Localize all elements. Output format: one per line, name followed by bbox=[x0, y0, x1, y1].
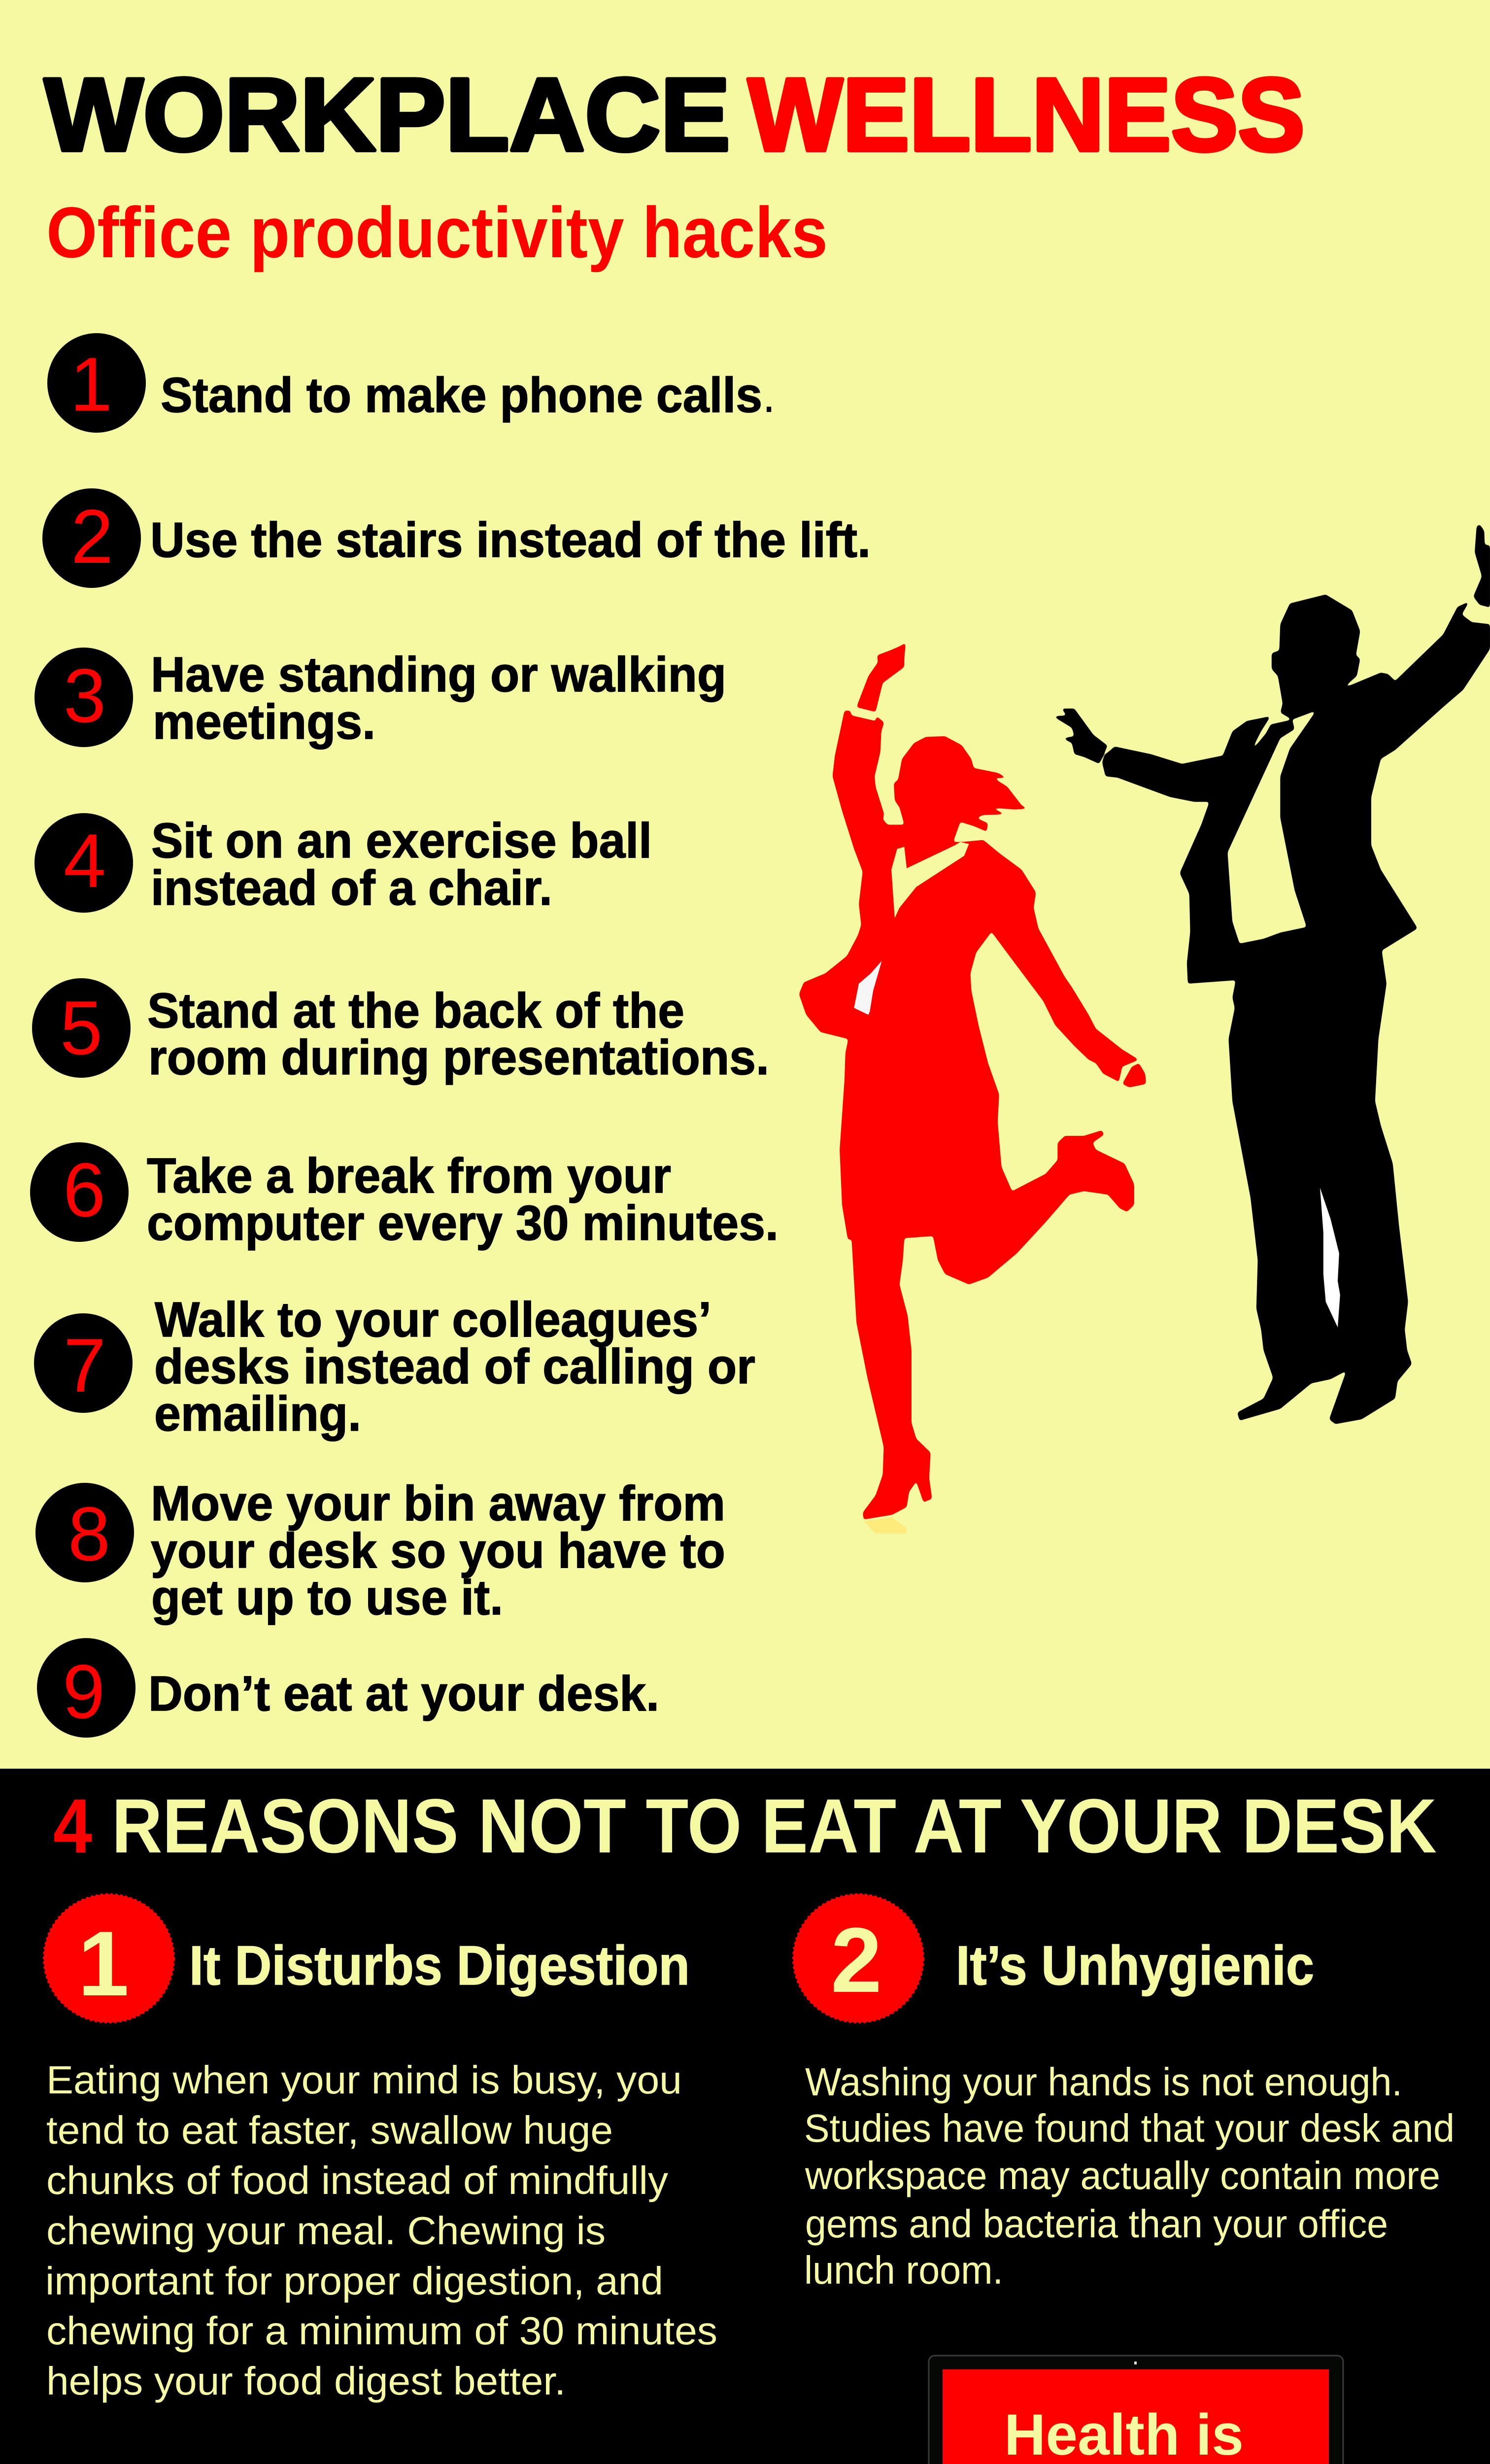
hack 4: instead of a chair. bbox=[151, 860, 552, 916]
reason 2: It’s Unhygienic bbox=[956, 1935, 1314, 1996]
hack 9: Don’t eat at your desk. bbox=[148, 1666, 659, 1721]
illustration: computer monitor bbox=[929, 2356, 1343, 2464]
reason 2 body bbox=[804, 2060, 1455, 2292]
hack 8: get up to use it. bbox=[151, 1570, 503, 1625]
hack 6: Take a break from your bbox=[147, 1148, 671, 1203]
hack 2 bbox=[42, 488, 871, 588]
hack 4 bbox=[34, 813, 652, 916]
hack 6: computer every 30 minutes. bbox=[147, 1196, 779, 1251]
reason 1: 1 bbox=[78, 1912, 129, 2015]
reason 1 body: chewing for a minimum of 30 minutes bbox=[46, 2309, 717, 2353]
hack 3: 3 bbox=[64, 653, 106, 738]
hack 1 bbox=[47, 333, 776, 433]
reason 2 body: lunch room. bbox=[804, 2248, 1003, 2292]
hack 3: Have standing or walking bbox=[151, 647, 726, 702]
reason 1 body: important for proper digestion, and bbox=[45, 2259, 663, 2303]
illustration: dancing man silhouette bbox=[1053, 525, 1490, 1424]
panel: office productivity hacks bbox=[0, 0, 1490, 1769]
reason 2 body: workspace may actually contain more bbox=[805, 2154, 1440, 2197]
hack 2: 2 bbox=[71, 494, 113, 579]
hack 5: Stand at the back of the bbox=[147, 983, 684, 1038]
reason 2: 2 bbox=[831, 1909, 882, 2012]
hack 9: 9 bbox=[63, 1649, 105, 1734]
hack 5 bbox=[32, 978, 769, 1085]
hack 2: Use the stairs instead of the lift. bbox=[150, 513, 871, 568]
title: WORKPLACE bbox=[44, 57, 730, 172]
reason 2 body: Studies have found that your desk and bbox=[804, 2106, 1455, 2150]
reason 1 body: tend to eat faster, swallow huge bbox=[46, 2108, 613, 2152]
reason 2 body: Washing your hands is not enough. bbox=[805, 2060, 1402, 2104]
hack 7: emailing. bbox=[154, 1386, 361, 1441]
hack 9 bbox=[37, 1638, 659, 1738]
hack 6 bbox=[30, 1142, 779, 1251]
hack 5: room during presentations. bbox=[148, 1030, 769, 1085]
hack 8: your desk so you have to bbox=[151, 1523, 725, 1578]
hack 7: Walk to your colleagues’ bbox=[155, 1292, 711, 1347]
subtitle: Office productivity hacks bbox=[46, 192, 828, 273]
reason 1 body: chunks of food instead of mindfully bbox=[46, 2158, 668, 2202]
hack 4: Sit on an exercise ball bbox=[151, 813, 652, 868]
hack 7: desks instead of calling or bbox=[154, 1339, 755, 1394]
hack 3 bbox=[34, 647, 726, 750]
reason 2 bbox=[793, 1894, 1455, 2292]
hack 7: 7 bbox=[64, 1323, 106, 1408]
hack 6: 6 bbox=[63, 1147, 105, 1232]
title: WELLNESS bbox=[748, 57, 1305, 172]
hack 7 bbox=[34, 1292, 755, 1441]
reason 1 body: chewing your meal. Chewing is bbox=[46, 2209, 606, 2253]
reason 1 body: Eating when your mind is busy, you bbox=[46, 2058, 682, 2102]
hack 1: 1 bbox=[70, 342, 112, 427]
hack 8: Move your bin away from bbox=[151, 1476, 725, 1531]
panel: 4 reasons not to eat at your desk bbox=[0, 1769, 1490, 2464]
hack 8: 8 bbox=[68, 1491, 110, 1576]
hack 8 bbox=[35, 1476, 725, 1625]
reason 1: It Disturbs Digestion bbox=[189, 1935, 690, 1996]
illustration: dancing woman silhouette bbox=[799, 643, 1146, 1534]
reason 1 body bbox=[45, 2058, 717, 2403]
title bbox=[44, 57, 1305, 172]
reason 1 body: helps your food digest better. bbox=[46, 2359, 566, 2403]
hack 1: Stand to make phone calls. bbox=[161, 368, 776, 423]
reason 2 body: gems and bacteria than your office bbox=[805, 2202, 1388, 2246]
reason 1 bbox=[44, 1894, 717, 2403]
hack 4: 4 bbox=[64, 818, 106, 903]
hack 5: 5 bbox=[60, 985, 102, 1070]
hack 3: meetings. bbox=[153, 694, 375, 750]
